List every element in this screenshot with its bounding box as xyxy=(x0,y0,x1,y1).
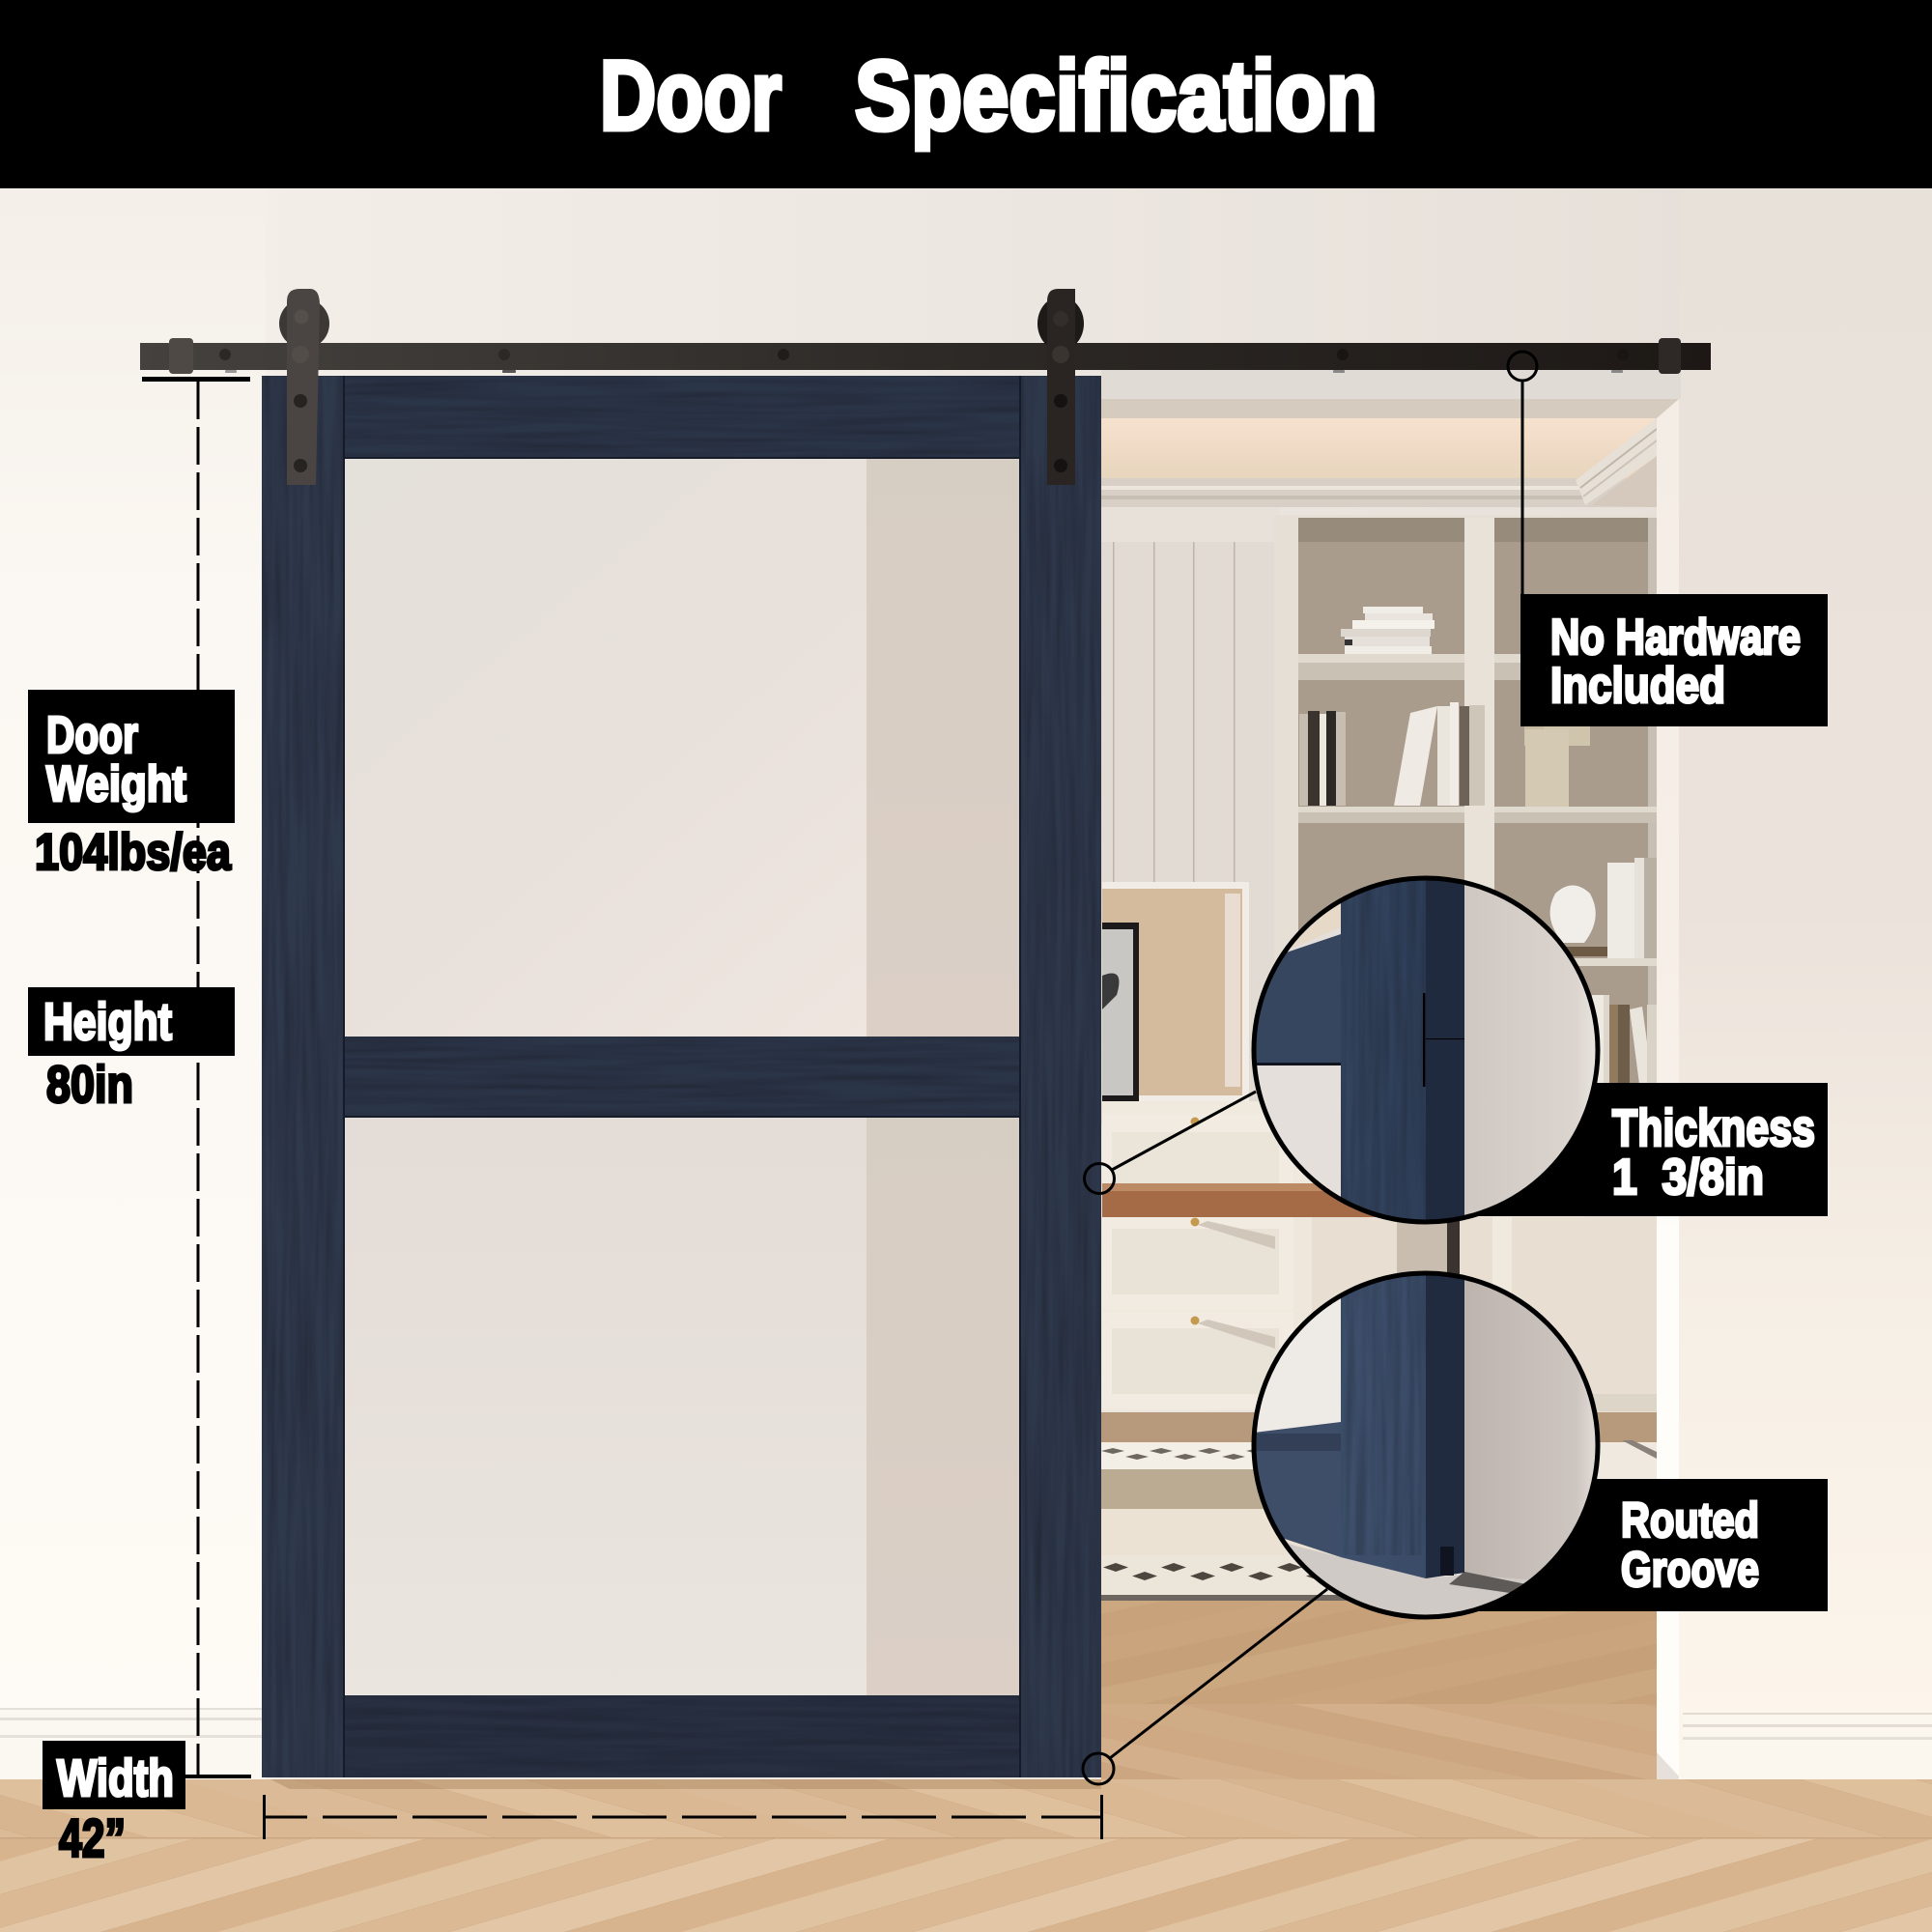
text: routed groove xyxy=(1621,1492,1759,1597)
shelf decor: upright books xyxy=(1299,702,1485,806)
label box: thickness xyxy=(1449,1083,1828,1216)
cabinet and counter xyxy=(1102,1101,1585,1410)
barn door xyxy=(262,376,1101,1777)
label: door weight: Door xyxy=(46,706,138,764)
glass panes xyxy=(345,459,1020,1695)
value: width: 42” xyxy=(59,1807,126,1868)
shelf decor: sculpture xyxy=(1524,686,1590,807)
bookshelf xyxy=(1274,515,1657,1191)
shelf decor: book stack xyxy=(1341,607,1435,654)
leader: no hardware xyxy=(1508,352,1537,595)
width dimension line xyxy=(263,1795,1103,1839)
door jamb xyxy=(1657,399,1682,1779)
interior floor and rug xyxy=(1101,1412,1657,1779)
label box: routed groove xyxy=(1468,1479,1828,1611)
text: routed groove: Routed xyxy=(1621,1492,1759,1548)
label: width: Width xyxy=(57,1749,174,1807)
room seen through the opening xyxy=(1101,399,1679,1779)
herringbone wood floor xyxy=(0,1779,1932,1932)
back wall panels and table leg xyxy=(1293,1217,1657,1415)
label: height: Height xyxy=(43,993,172,1051)
title banner xyxy=(0,0,1932,188)
text: routed groove: Groove xyxy=(1621,1542,1759,1597)
value: door weight: 104lbs/ea xyxy=(35,824,231,881)
detail circle: routed groove xyxy=(1246,1265,1605,1633)
beadboard wall panel xyxy=(1101,507,1280,1125)
right stile xyxy=(1020,376,1101,1777)
left stile xyxy=(262,376,345,1777)
label: door weight: Weight xyxy=(46,756,186,812)
shelf decor: vase xyxy=(1550,885,1607,956)
top rail xyxy=(345,376,1020,459)
width leader xyxy=(185,1775,251,1778)
title banner: Door xyxy=(600,41,781,151)
label: height xyxy=(28,987,235,1056)
left hanger xyxy=(279,289,329,485)
label: door weight xyxy=(28,690,235,823)
baseboards xyxy=(0,1708,1932,1779)
label: no hardware included: Included xyxy=(1550,658,1725,714)
sliding track xyxy=(140,338,1711,374)
bottom rail xyxy=(345,1695,1020,1777)
label: no hardware included xyxy=(1520,594,1828,726)
text: thickness: Thickness xyxy=(1612,1099,1815,1157)
leader: thickness xyxy=(1084,1092,1256,1194)
text: thickness xyxy=(1612,1099,1815,1206)
label: width xyxy=(43,1741,185,1809)
stop block left xyxy=(169,338,193,374)
right hanger xyxy=(1037,289,1084,485)
framed art xyxy=(1102,882,1249,1101)
middle rail xyxy=(345,1037,1020,1118)
height dimension line xyxy=(142,377,250,1775)
leader: routed groove xyxy=(1083,1589,1327,1784)
stop block right xyxy=(1659,338,1681,374)
soffit and cove light xyxy=(1101,399,1679,507)
detail circle: door edge thickness xyxy=(1246,869,1605,1227)
shelf decor: right-hand books xyxy=(1592,858,1657,1092)
label: no hardware included: No Hardware xyxy=(1550,610,1801,666)
value: height: 80in xyxy=(46,1056,133,1114)
title banner: Specification xyxy=(855,41,1378,151)
text: thickness: 1 3/8in xyxy=(1612,1150,1764,1206)
